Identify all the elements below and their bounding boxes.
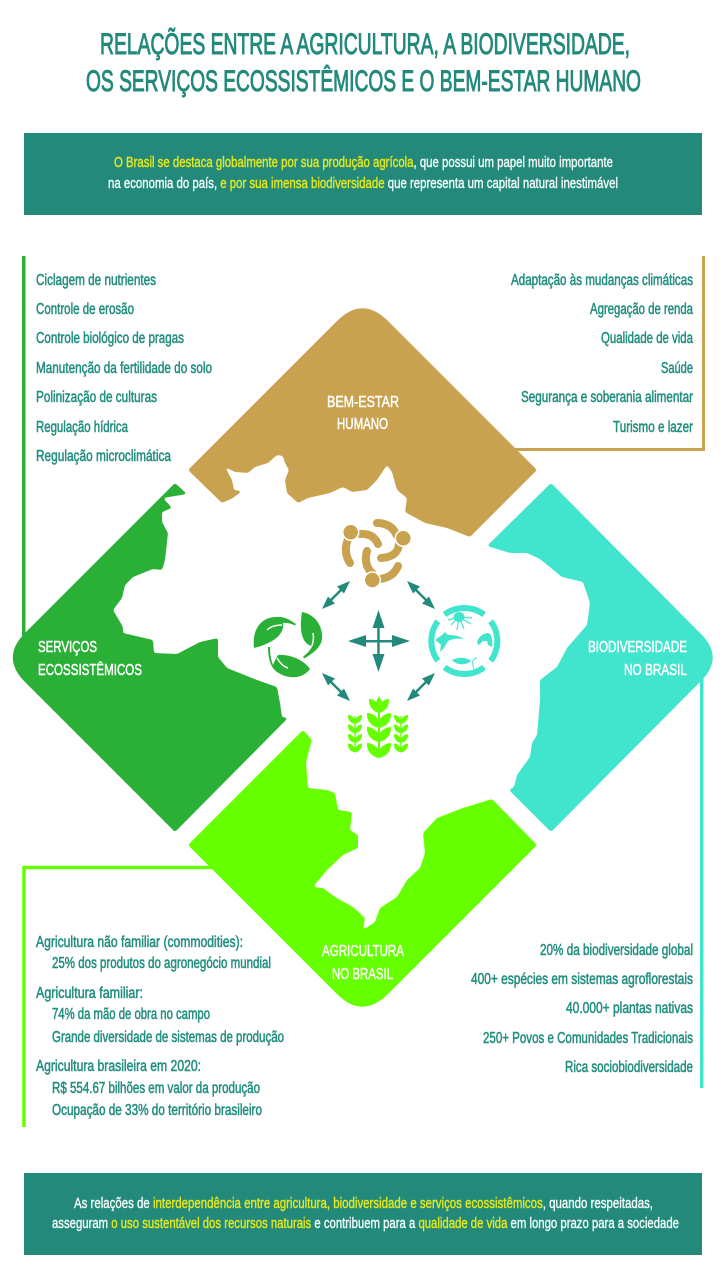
list: agricultura: Agricultura brasileira em 2020: xyxy=(36,1058,201,1075)
list: bem-estar humano: Qualidade de vida xyxy=(601,330,693,347)
panel: serviços ecossistêmicos: SERVIÇOS xyxy=(38,639,97,656)
footer banner: As relações de interdependência entre agricultura, biodiversidade e serviços ecossistêmicos, quando respeitadas, xyxy=(74,1195,653,1212)
list: biodiversidade xyxy=(471,942,693,1076)
spider xyxy=(448,612,472,630)
list: agricultura: Ocupação de 33% do território brasileiro xyxy=(52,1102,262,1119)
panel: agricultura no brasil: AGRICULTURA xyxy=(322,943,404,960)
panel: biodiversidade no brasil: NO BRASIL xyxy=(624,662,687,679)
list: serviços ecossistêmicos: Ciclagem de nutrientes xyxy=(36,272,156,289)
panel: bem-estar humano: BEM-ESTAR xyxy=(327,394,399,411)
icon: three leaves xyxy=(254,612,322,677)
connector line: bem-estar humano xyxy=(515,256,704,450)
arrow: bottom left double xyxy=(322,673,350,701)
list: serviços ecossistêmicos xyxy=(36,272,212,465)
arrow: top left double xyxy=(322,581,350,609)
connector line: agricultura xyxy=(24,868,215,1127)
connector line: serviços ecossistêmicos xyxy=(22,256,26,636)
panel: bem-estar humano xyxy=(188,308,537,537)
footer banner xyxy=(24,1173,702,1255)
list: bem-estar humano: Saúde xyxy=(661,360,693,377)
list: biodiversidade: 40.000+ plantas nativas xyxy=(566,1000,693,1017)
list: agricultura: Agricultura familiar: xyxy=(36,985,143,1002)
panel: biodiversidade no brasil xyxy=(487,483,713,832)
list: serviços ecossistêmicos: Regulação microclimática xyxy=(36,448,171,465)
icon: crop plants xyxy=(348,696,408,758)
panel: serviços ecossistêmicos: ECOSSISTÊMICOS xyxy=(38,660,142,679)
leaf xyxy=(452,657,477,669)
panel: serviços ecossistêmicos xyxy=(13,483,288,832)
arrow: central four-way xyxy=(348,610,410,672)
footer banner: asseguram o uso sustentável dos recursos naturais e contribuem para a qualidade de vida em longo prazo para a sociedade xyxy=(52,1215,679,1232)
arrow: bottom right double xyxy=(407,673,435,701)
panel: biodiversidade no brasil: BIODIVERSIDADE xyxy=(588,639,687,656)
list: serviços ecossistêmicos: Controle de erosão xyxy=(36,301,134,318)
list: serviços ecossistêmicos: Regulação hídrica xyxy=(36,419,128,436)
list: bem-estar humano: Turismo e lazer xyxy=(613,419,693,436)
list: agricultura xyxy=(36,934,284,1119)
intro banner: na economia do país, e por sua imensa biodiversidade que representa um capital natural inestimável xyxy=(108,175,618,192)
list: serviços ecossistêmicos: Polinização de culturas xyxy=(36,389,157,406)
fish xyxy=(477,633,492,647)
list: agricultura: Grande diversidade de sistemas de produção xyxy=(52,1029,284,1046)
panel: agricultura no brasil xyxy=(188,730,537,1007)
panel: bem-estar humano: HUMANO xyxy=(337,416,388,433)
list: serviços ecossistêmicos: Manutenção da fertilidade do solo xyxy=(36,360,212,377)
arrow: top right double xyxy=(407,581,435,609)
list: serviços ecossistêmicos: Controle biológico de pragas xyxy=(36,330,184,347)
title xyxy=(86,27,641,98)
list: agricultura: R$ 554.67 bilhões em valor da produção xyxy=(52,1080,260,1097)
list: bem-estar humano xyxy=(511,272,693,436)
list: agricultura: 25% dos produtos do agronegócio mundial xyxy=(52,955,271,972)
list: agricultura: Agricultura não familiar (commodities): xyxy=(36,934,243,951)
panel: agricultura no brasil: NO BRASIL xyxy=(332,966,393,983)
bird xyxy=(435,632,464,652)
intro banner xyxy=(24,133,702,215)
intro banner: O Brasil se destaca globalmente por sua produção agrícola, que possui um papel muito importante xyxy=(114,154,613,171)
icon: biodiversity ring xyxy=(431,608,497,674)
list: agricultura: 74% da mão de obra no campo xyxy=(52,1006,210,1023)
connector line: biodiversidade xyxy=(700,670,704,1088)
icon: people circle xyxy=(343,523,411,588)
